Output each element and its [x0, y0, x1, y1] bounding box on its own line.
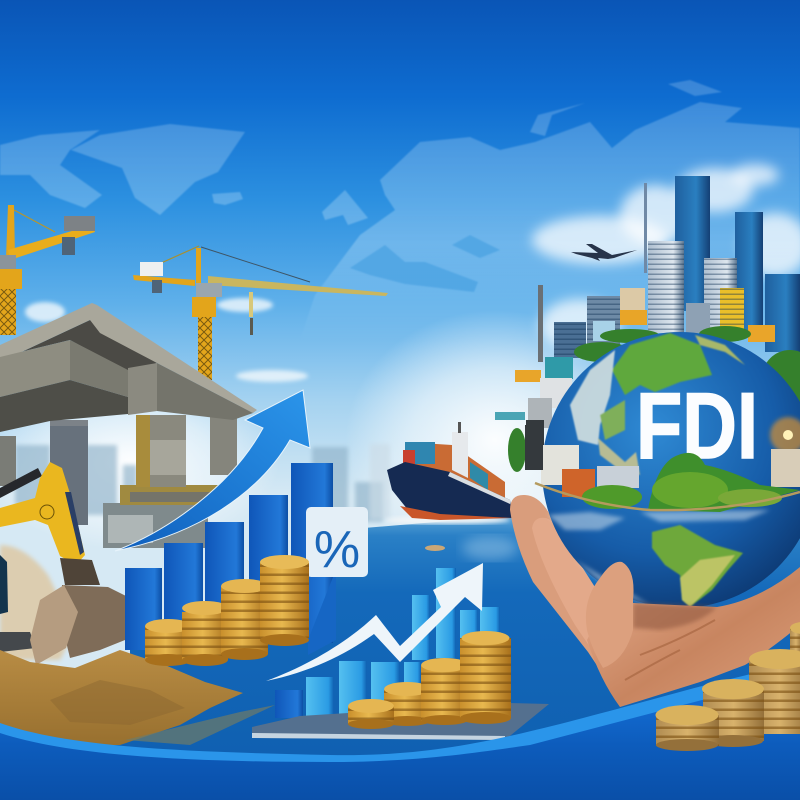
- hand palm and thumb: [586, 562, 800, 707]
- clouds left: [25, 298, 308, 382]
- crane left: [0, 205, 95, 335]
- uk: [322, 190, 368, 225]
- deck parapet: [0, 303, 257, 413]
- container stack: [495, 357, 573, 465]
- bucket: [62, 585, 132, 658]
- side beam: [157, 363, 253, 420]
- front face right: [70, 340, 128, 397]
- lattice tower: [538, 285, 543, 362]
- sand behind excavator: [0, 545, 75, 660]
- base scaffolding: [103, 485, 225, 548]
- city skyline: [495, 176, 800, 465]
- greenland: [71, 124, 245, 215]
- crane centre: [133, 246, 388, 380]
- clouds right: [532, 164, 800, 351]
- boats and reflections: [425, 536, 518, 560]
- novaya zemlya: [530, 103, 585, 136]
- coins left group: [145, 555, 309, 666]
- cargo containers: [403, 422, 505, 498]
- hull: [387, 462, 512, 518]
- black sea: [452, 235, 500, 258]
- growth arrow white: [266, 563, 483, 681]
- plane: [571, 244, 637, 261]
- front face left: [0, 340, 70, 397]
- bar chart large: [125, 463, 336, 655]
- concrete piers: [0, 415, 237, 525]
- growth arrow blue: [115, 390, 310, 551]
- cab: [0, 555, 8, 614]
- horizon glow: [345, 310, 645, 570]
- north america: [612, 333, 712, 395]
- deck underside shadow: [0, 320, 157, 372]
- coins centre group: [348, 631, 511, 729]
- bottom curved band: [0, 662, 800, 800]
- ship: [386, 422, 512, 524]
- bridge under construction: [0, 303, 257, 548]
- trees behind globe: [508, 326, 800, 472]
- spire: [644, 183, 647, 273]
- continents: [570, 333, 745, 607]
- hydraulic rod: [0, 468, 42, 498]
- percent tile: [306, 507, 368, 579]
- excavator: [0, 462, 132, 665]
- small bar chart: [275, 568, 500, 721]
- pier cap: [128, 363, 157, 415]
- globe bowl rim: [535, 483, 800, 510]
- percent tile: %: [314, 521, 360, 579]
- siberian islands: [668, 80, 722, 96]
- globe top city and greenery: [525, 425, 800, 512]
- dirt mound: [0, 650, 275, 745]
- sun flare: [770, 417, 800, 453]
- palm shadow under globe: [633, 603, 717, 630]
- mediterranean: [350, 245, 478, 292]
- world map silhouette: [0, 80, 800, 340]
- canada islands: [0, 130, 102, 208]
- soffit: [0, 380, 128, 432]
- eurasia and africa: [300, 102, 800, 340]
- platform: [252, 703, 549, 740]
- tall towers: [648, 176, 800, 352]
- left sky glow: [0, 370, 280, 550]
- mid buildings: [554, 288, 775, 358]
- hand back fingers: [510, 495, 600, 670]
- sea: [0, 515, 800, 775]
- cloud streaks: [548, 510, 770, 605]
- boom: [0, 462, 85, 565]
- coins right group: [656, 622, 800, 751]
- globe: [542, 332, 800, 608]
- bucket link: [60, 558, 100, 585]
- south america: [652, 525, 743, 607]
- distant skyline: [15, 444, 390, 522]
- FDI label: FDI: [636, 373, 758, 478]
- iceland: [212, 192, 243, 205]
